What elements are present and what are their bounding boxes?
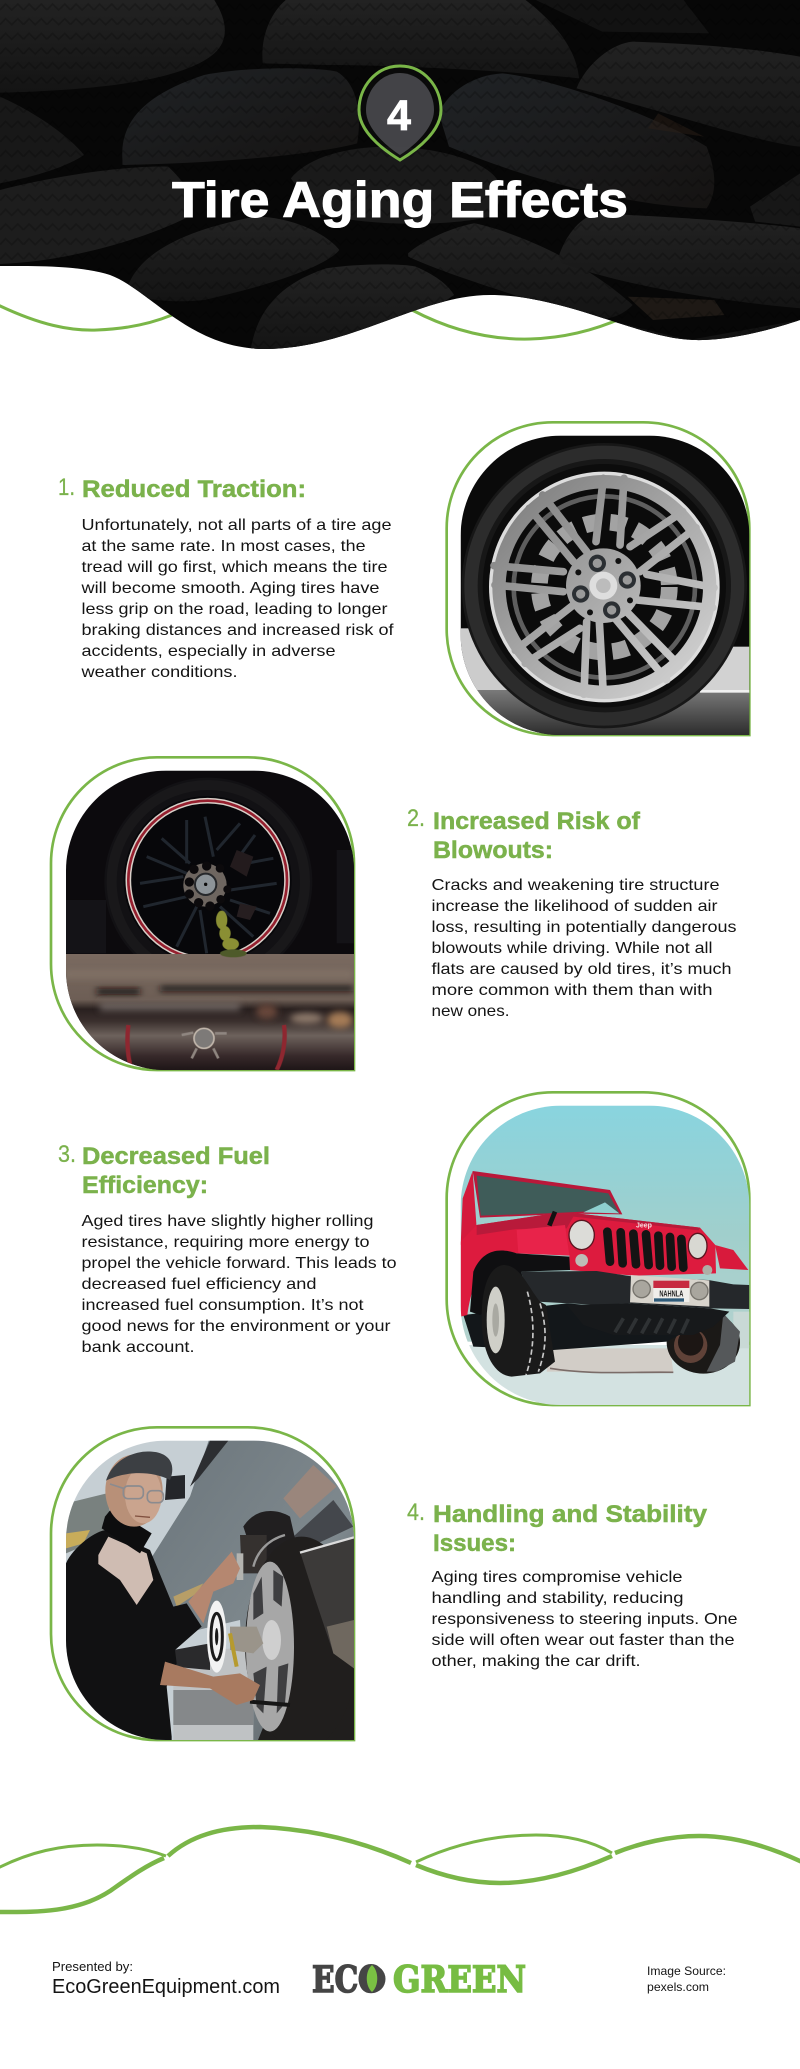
header photo: pile of old tires <box>0 0 800 367</box>
heading: 4. Handling and Stability Issues: Issues: <box>433 1530 516 1557</box>
text block: reduced traction description: tread will go first, which means the tire <box>82 559 388 576</box>
text block: handling description <box>432 1569 738 1670</box>
text block: reduced traction description: Unfortunately, not all parts of a tire age <box>82 517 392 534</box>
text block: blowouts description: new ones. <box>432 1003 510 1020</box>
panel: increased risk of blowouts <box>51 757 737 1074</box>
photo: red jeep on snow with green arch frame: NAHNLA <box>659 1289 683 1298</box>
heading: 2. Increased Risk of Blowouts: Blowouts: <box>433 837 553 864</box>
heading: 2. Increased Risk of Blowouts <box>407 805 641 864</box>
text block: fuel efficiency description: increased fuel consumption. It’s not <box>82 1297 364 1314</box>
text block: handling description: side will often wear out faster than the <box>432 1632 735 1649</box>
logo: Eco Green: ECO <box>312 1959 384 2001</box>
text block: handling description: responsiveness to steering inputs. One <box>432 1611 738 1628</box>
panel: handling and stability issues <box>51 1427 738 1750</box>
footer: image source <box>647 1964 726 1994</box>
heading: 4. Handling and Stability Issues: 4. <box>407 1499 425 1526</box>
text block: fuel efficiency description: Aged tires have slightly higher rolling <box>82 1213 374 1230</box>
footer: image source: pexels.com <box>647 1980 709 1994</box>
footer: presented by: Presented by: <box>52 1959 133 1974</box>
panel: decreased fuel efficiency <box>58 1092 753 1408</box>
text block: fuel efficiency description: good news for the environment or your <box>82 1318 391 1335</box>
text block: blowouts description: loss, resulting in potentially dangerous <box>432 919 736 936</box>
text block: reduced traction description: at the same rate. In most cases, the <box>82 538 366 555</box>
heading: 3. Decreased Fuel Efficiency: Decreased Fuel <box>82 1143 270 1170</box>
header decorative green wave right <box>412 310 622 339</box>
heading: 3. Decreased Fuel Efficiency <box>58 1141 270 1199</box>
text block: blowouts description: blowouts while driving. While not all <box>432 940 712 957</box>
heading: 1. Reduced Traction: 1. <box>58 474 75 501</box>
text block: fuel efficiency description: bank account. <box>82 1339 194 1356</box>
header decorative green wave left <box>0 305 172 330</box>
text block: reduced traction description: weather conditions. <box>80 664 238 681</box>
text block: blowouts description: Cracks and weakening tire structure <box>432 877 720 894</box>
photo: mechanic checking wheel alignment with green arch frame <box>51 1427 360 1750</box>
text block: blowouts description: flats are caused by old tires, it’s much <box>432 961 732 978</box>
panel: reduced traction <box>58 422 753 738</box>
text block: reduced traction description: will become smooth. Aging tires have <box>80 580 380 597</box>
text block: fuel efficiency description: propel the vehicle forward. This leads to <box>82 1255 397 1272</box>
text block: fuel efficiency description <box>82 1213 397 1356</box>
text block: fuel efficiency description: resistance, requiring more energy to <box>82 1234 370 1251</box>
text block: handling description: handling and stability, reducing <box>432 1590 684 1607</box>
footer: presented by <box>52 1959 280 1998</box>
footer decorative wave lines <box>0 1827 800 1912</box>
heading: 2. Increased Risk of Blowouts: Increased Risk of <box>433 808 641 835</box>
badge: number 4 marker: 4 <box>387 92 411 140</box>
heading: 3. Decreased Fuel Efficiency: 3. <box>58 1141 76 1168</box>
photo: red jeep on snow with green arch frame <box>447 1092 753 1408</box>
text block: blowouts description: more common with them than with <box>432 982 712 999</box>
photo: alloy wheel with green arch frame <box>447 422 753 738</box>
text block: blowouts description: increase the likelihood of sudden air <box>432 898 718 915</box>
text block: fuel efficiency description: decreased fuel efficiency and <box>82 1276 316 1293</box>
text block: reduced traction description: less grip on the road, leading to longer <box>82 601 388 618</box>
heading: 4. Handling and Stability Issues: Handling and Stability <box>433 1501 708 1528</box>
logo: Eco Green: GREEN <box>393 1959 526 2001</box>
photo: flat tire by a puddle with green arch frame <box>51 757 360 1074</box>
heading: 1. Reduced Traction: Reduced Traction: <box>82 476 306 503</box>
text block: reduced traction description: braking distances and increased risk of <box>82 622 394 639</box>
text block: blowouts description <box>432 877 736 1020</box>
photo: red jeep on snow with green arch frame: Jeep <box>636 1223 652 1230</box>
heading: 4. Handling and Stability Issues <box>407 1499 708 1557</box>
footer: image source: Image Source: <box>647 1964 726 1978</box>
text block: reduced traction description: accidents, especially in adverse <box>82 643 336 660</box>
text block: reduced traction description <box>80 517 394 681</box>
badge: number 4 marker <box>359 66 441 160</box>
heading: 3. Decreased Fuel Efficiency: Efficiency: <box>82 1172 208 1199</box>
logo: Eco Green <box>312 1959 526 2001</box>
text block: handling description: Aging tires compromise vehicle <box>432 1569 683 1586</box>
footer: presented by: EcoGreenEquipment.com <box>52 1976 280 1998</box>
title: Tire Aging Effects <box>172 172 628 228</box>
text block: handling description: other, making the car drift. <box>432 1653 640 1670</box>
heading: 2. Increased Risk of Blowouts: 2. <box>407 805 425 832</box>
